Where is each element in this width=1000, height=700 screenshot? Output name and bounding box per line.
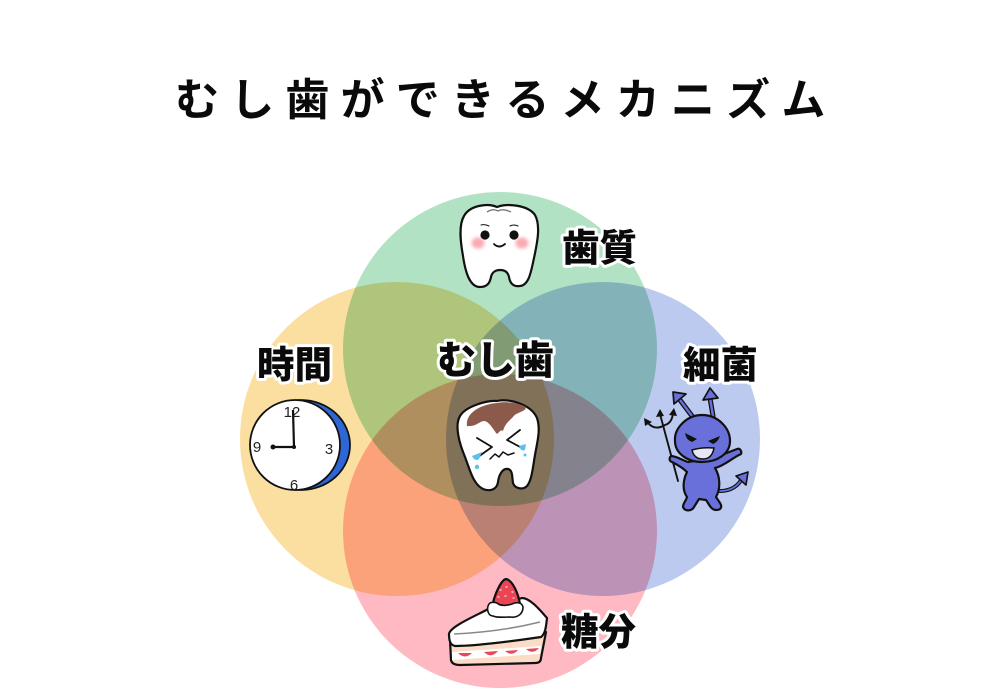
circle: sugar [343,374,657,688]
icon: clock: 3 [325,441,333,458]
label: cavity: むし歯 [437,340,554,383]
icon: devil [644,388,748,510]
trident [648,413,678,481]
label: tooth quality: 歯質 [562,227,637,269]
label: time: 時間 [257,344,332,386]
icon: clock: 12 [284,404,300,421]
icon: clock: 9 [253,439,261,456]
venn diagram: four overlapping circles [240,192,760,688]
icon: healthy tooth [460,205,538,287]
icon: decayed tooth [457,400,539,490]
antennae [680,398,713,416]
body, limbs [670,449,741,510]
circle: time [240,282,554,596]
icon: clock [250,400,350,494]
circle: bacteria [446,282,760,596]
icon: strawberry shortcake [449,579,547,665]
icon: clock: 6 [290,477,298,494]
title: むし歯ができるメカニズム [175,76,837,125]
label: sugar: 糖分 [561,611,636,653]
tail [720,477,743,491]
head [675,415,730,462]
label: bacteria: 細菌 [683,344,758,386]
circle: tooth quality [343,192,657,506]
